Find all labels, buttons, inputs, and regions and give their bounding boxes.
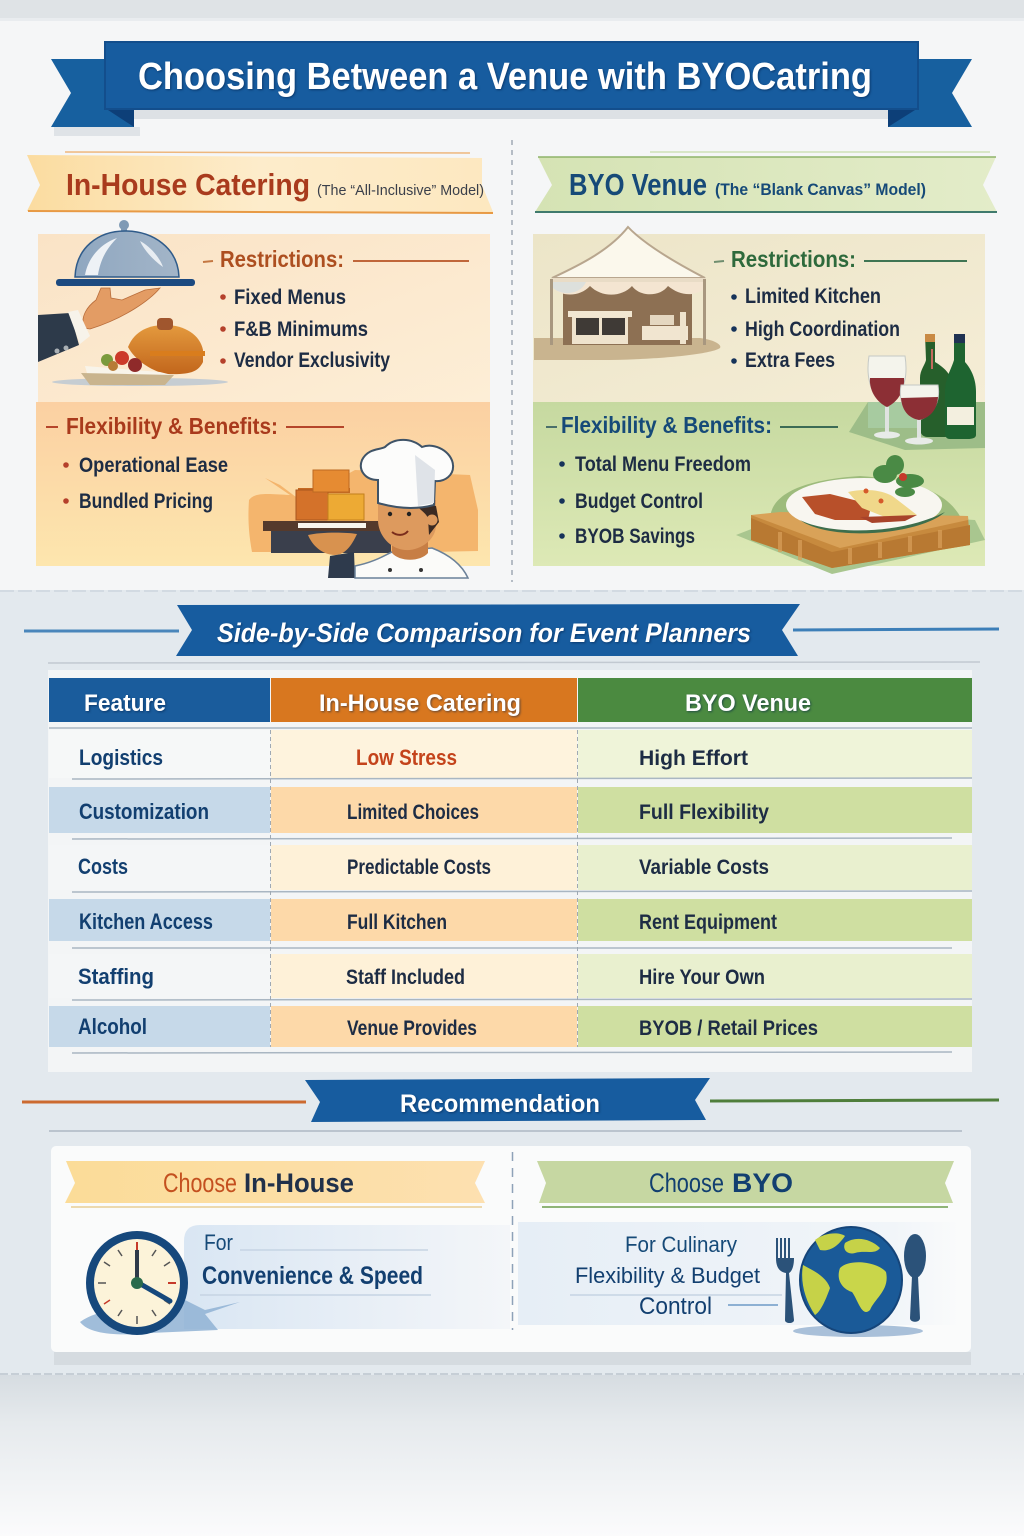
flexibility list (559, 453, 751, 548)
section header: side-by-side comparison (24, 604, 999, 663)
row: kitchen access (49, 899, 972, 941)
bottom dashed strip (0, 1373, 1024, 1375)
title banner (51, 42, 972, 136)
flexibility list (63, 454, 228, 513)
dashed section divider (0, 590, 1024, 592)
BYO heading ribbon (535, 152, 997, 212)
choose BYO note (518, 1222, 960, 1325)
flexibility list: Budget Control (575, 490, 703, 513)
row: logistics: Low Stress (356, 745, 457, 770)
row: customization: Customization (79, 799, 209, 824)
icon: wine glasses and bottles (849, 334, 985, 450)
row: alcohol: Alcohol (78, 1014, 147, 1039)
section header: recommendation (22, 1078, 999, 1131)
icon: cloche on hand (38, 220, 228, 386)
restrictions list (220, 286, 390, 372)
flexibility block (36, 402, 490, 578)
choose in-house ribbon: In-House (244, 1168, 354, 1198)
restrictions list: High Coordination (745, 318, 900, 341)
flexibility heading: Flexibility & Benefits: (561, 412, 772, 438)
row: staffing: Staffing (78, 964, 154, 989)
restrictions list: Fixed Menus (234, 286, 346, 309)
table header: BYO Venue (685, 690, 811, 717)
title text: Choosing Between a Venue with BYOCatring (138, 56, 872, 98)
in-house heading ribbon: In-House Catering (66, 167, 310, 202)
row: costs: Predictable Costs (347, 856, 491, 879)
section header: side-by-side comparison: Side-by-Side Comparison for Event Planners (217, 618, 751, 648)
choose in-house ribbon: Choose (163, 1168, 237, 1198)
BYO heading ribbon: BYO Venue (569, 167, 707, 202)
restrictions list (731, 285, 900, 372)
flexibility list: Total Menu Freedom (575, 453, 751, 476)
choose BYO ribbon (537, 1161, 954, 1207)
choose in-house note (184, 1225, 510, 1329)
row: costs: Variable Costs (639, 856, 769, 879)
row: staffing: Hire Your Own (639, 966, 765, 989)
row: customization: Limited Choices (347, 801, 479, 824)
choose in-house ribbon (65, 1161, 485, 1207)
panel: BYO venue (533, 152, 997, 574)
choose BYO ribbon: BYO (732, 1168, 793, 1198)
row: customization (49, 787, 972, 833)
table header: In-House Catering (319, 690, 521, 717)
section header: recommendation: Recommendation (400, 1090, 600, 1118)
icon: plate on board (736, 455, 985, 574)
row: alcohol: Venue Provides (347, 1017, 477, 1040)
restrictions list: Extra Fees (745, 349, 835, 372)
choose BYO ribbon: Choose (649, 1168, 724, 1198)
flexibility list: Bundled Pricing (79, 490, 213, 513)
restrictions list: Limited Kitchen (745, 285, 881, 308)
in-house heading ribbon: (The “All-Inclusive” Model) (317, 182, 484, 199)
row: logistics: Logistics (79, 745, 163, 770)
flexibility list: BYOB Savings (575, 525, 695, 548)
icon: chef with tray (248, 440, 478, 578)
table header (49, 678, 972, 722)
row: staffing: Staff Included (346, 966, 465, 989)
choose BYO note: For Culinary (625, 1232, 737, 1257)
panel: recommendation card (51, 1146, 971, 1365)
row: alcohol: BYOB / Retail Prices (639, 1017, 818, 1040)
panel: in-house catering (27, 152, 493, 578)
icon: globe with fork and spoon (776, 1227, 926, 1337)
row: kitchen access: Full Kitchen (347, 911, 447, 934)
row: customization: Full Flexibility (639, 801, 769, 824)
restrictions list: F&B Minimums (234, 318, 368, 341)
icon: tent (534, 227, 720, 360)
flexibility block (533, 402, 985, 574)
choose BYO note: Flexibility & Budget (575, 1263, 760, 1288)
row: alcohol (49, 1006, 972, 1047)
row: costs (49, 845, 972, 890)
restrictions list: Vendor Exclusivity (234, 349, 390, 372)
restrictions block (38, 220, 490, 402)
choose BYO note: Control (639, 1293, 712, 1320)
in-house heading ribbon (27, 152, 493, 213)
row: costs: Costs (78, 854, 128, 879)
row: staffing (49, 954, 972, 998)
restrictions heading: Restrictions: (220, 246, 344, 272)
restrictions heading: Restrictions: (731, 246, 856, 272)
row: logistics: High Effort (639, 747, 748, 770)
choose in-house note: For (204, 1230, 233, 1255)
flexibility list: Operational Ease (79, 454, 228, 477)
vertical divider (511, 140, 513, 582)
flexibility heading: Flexibility & Benefits: (66, 413, 278, 439)
BYO heading ribbon: (The “Blank Canvas” Model) (715, 180, 926, 199)
row: kitchen access: Kitchen Access (79, 909, 213, 934)
row: logistics (49, 730, 972, 778)
table header: Feature (84, 690, 166, 717)
restrictions block (533, 227, 985, 402)
comparison table (48, 670, 972, 1072)
row: kitchen access: Rent Equipment (639, 911, 777, 934)
icon: clock (80, 1231, 240, 1335)
choose in-house note: Convenience & Speed (202, 1262, 423, 1290)
